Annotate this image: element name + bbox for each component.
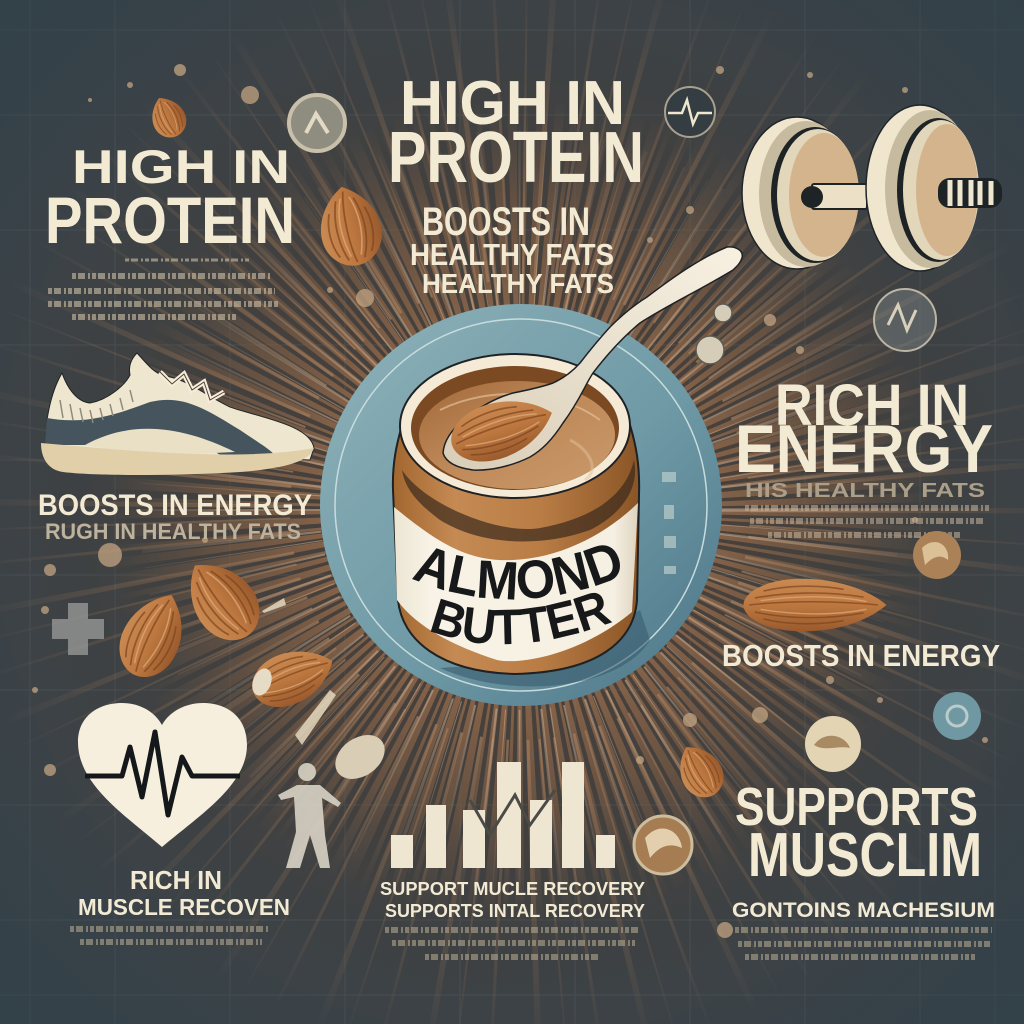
heading: rich in muscle recovery: MUSCLE RECOVEN <box>78 894 290 920</box>
heading: rich in energy: HIS HEALTHY FATS <box>745 480 985 502</box>
icon: almond right <box>744 579 886 631</box>
heading: high in protein center <box>388 69 644 299</box>
spoon with almond <box>443 247 742 472</box>
heading: rich in energy: ENERGY <box>735 411 993 487</box>
heading: rich in energy: RICH IN <box>775 373 969 438</box>
micro text: left top block <box>48 260 278 317</box>
heading: rich in energy <box>735 373 993 502</box>
icon: pulse badge <box>665 87 715 137</box>
heading: high in protein center: PROTEIN <box>388 118 644 198</box>
scattered particles <box>32 64 988 938</box>
jar label text: ALMOND <box>412 545 620 600</box>
bar chart <box>391 762 615 868</box>
icon: medal badge <box>289 95 345 151</box>
icon: running shoe <box>41 353 314 475</box>
heading: boosts in energy left: RUGH IN HEALTHY FATS <box>45 519 301 544</box>
heading: high in protein center: HIGH IN <box>400 69 625 138</box>
heading: high in protein left: PROTEIN <box>45 183 295 257</box>
jar label text: BUTTER <box>430 592 612 644</box>
icon: almond left <box>312 181 388 271</box>
heading: high in protein center: HEALTHY FATS <box>422 268 614 299</box>
heading: high in protein center: BOOSTS IN <box>422 200 590 244</box>
heading: supports muscle: SUPPORTS <box>735 777 978 837</box>
heading: boosts in energy left: BOOSTS IN ENERGY <box>38 489 312 522</box>
icon: medical cross <box>52 603 104 655</box>
icon: ghost pulse circle <box>874 289 936 351</box>
plate micro marks <box>662 472 676 574</box>
icon: blue badge <box>933 692 981 740</box>
circular plate <box>320 304 722 706</box>
micro text: bottom left <box>70 929 270 942</box>
icon: almond small top left <box>144 91 192 143</box>
heading: high in protein center: HEALTHY FATS <box>410 237 614 272</box>
icon: nut fragment <box>327 726 393 788</box>
heading: supports muscle <box>732 777 995 922</box>
icon: cream nut <box>805 716 861 772</box>
heading: supports muscle: GONTOINS MACHESIUM <box>732 899 995 922</box>
heading: high in protein left: HIGH IN <box>72 140 290 193</box>
heading: high in protein left <box>45 140 295 257</box>
almond butter jar <box>392 353 650 686</box>
heading: rich in muscle recovery: RICH IN <box>130 865 222 895</box>
icons: almonds left cluster <box>108 547 342 717</box>
icon: nut badge bottom <box>634 816 692 874</box>
jar label text <box>412 545 620 644</box>
icon: figure silhouette <box>278 763 341 868</box>
icon: heart with pulse <box>78 703 247 847</box>
heading: rich in muscle recovery <box>78 865 290 920</box>
micro text: bottom center <box>385 930 640 957</box>
icon: dumbbell <box>742 105 1002 271</box>
micro text: bottom right <box>735 930 992 957</box>
micro text: right block <box>745 508 990 535</box>
heading: support muscle recovery <box>380 879 645 921</box>
heading: boosts in energy left <box>38 489 312 544</box>
heading: support muscle recovery: SUPPORTS INTAL RECOVERY <box>385 901 645 921</box>
stick and streak decorations <box>262 598 336 745</box>
heading: support muscle recovery: SUPPORT MUCLE RECOVERY <box>380 879 645 899</box>
coins <box>696 304 732 364</box>
icon: almond bottom right <box>668 737 732 805</box>
icon: nut badge right <box>913 531 961 579</box>
heading: boosts in energy right: BOOSTS IN ENERGY <box>722 638 1000 673</box>
